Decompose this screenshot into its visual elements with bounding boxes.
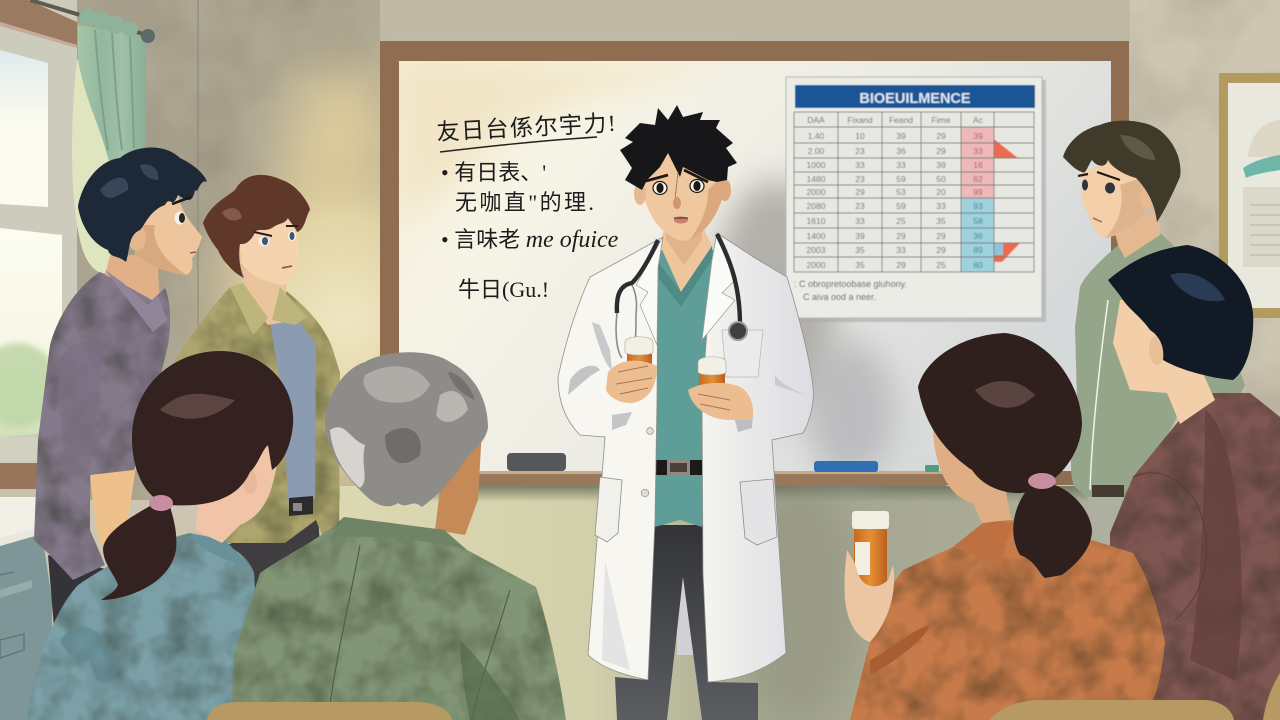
chart table: 29 [896,231,906,241]
neck and face [664,215,702,265]
chart table: 20 [936,187,946,197]
whiteboard handwriting: 牛日(Gu.! [458,277,549,302]
chart table: 25 [896,216,906,226]
chart table: 23 [855,174,865,184]
coat left panel [558,237,663,680]
chart table: 29 [936,245,946,255]
chart footnote [794,279,907,302]
chair backs [207,673,1280,720]
whiteboard handwriting: 友日台係尔宇力! [436,111,618,145]
hair [1063,121,1180,222]
person: grey-haired man in green jacket [232,352,566,720]
hair [203,175,310,278]
chart table: 35 [855,245,865,255]
eye and brow [172,197,191,204]
hair [78,147,207,262]
wall poster at right [1219,73,1280,318]
chart table: 2.00 [808,146,825,156]
chart header [795,85,1035,108]
chart table: 29 [896,260,906,270]
neck [1113,210,1160,258]
chart table: 53 [896,187,906,197]
whiteboard handwriting: • 有日表、' [441,160,546,185]
neck [933,430,1012,530]
eyes and mouth [254,226,298,236]
shirt [34,272,170,580]
chart table: 33 [896,160,906,170]
lapels [636,233,735,345]
T-shirt [270,320,316,500]
neck [195,445,279,543]
coat right panel [702,233,813,682]
chart header: BIOEUILMENCE [859,91,971,107]
whiteboard handwriting: 无咖直"的理. [455,190,596,215]
hair [1108,245,1253,380]
chart table: 39 [855,231,865,241]
chart table: 62 [973,174,983,184]
person: standing man in green shirt [1063,121,1245,600]
hair tie [1028,473,1056,489]
bioequivalence chart poster [786,77,1046,322]
person: pharmacist in white coat [558,105,813,720]
chart table: 59 [896,174,906,184]
chart table: 33 [896,245,906,255]
bottle in hand [845,511,894,642]
hair [918,333,1082,493]
neck [105,255,160,302]
chart table: DAA [807,115,825,125]
face and neck [1113,300,1215,424]
ponytail [1013,484,1092,578]
chart table: 23 [855,201,865,211]
chart table: 39 [896,131,906,141]
chart table: 93 [973,201,983,211]
chart table: 16 [973,160,983,170]
chart table: 1000 [807,160,826,170]
hair [620,105,737,190]
chart table: 39 [936,160,946,170]
chart table: Fime [932,115,951,125]
person: woman in orange shirt with bottle [845,333,1165,720]
chart table: 29 [936,131,946,141]
chart table: 35 [936,216,946,226]
chart table: 2003 [807,245,826,255]
chart table: Fixand [847,115,873,125]
curtain [30,0,155,273]
trousers [48,555,110,650]
hair [132,351,293,505]
chart table: 89 [973,245,983,255]
chart table: 33 [936,201,946,211]
chart table: 59 [896,201,906,211]
chart table: 35 [855,260,865,270]
face [135,195,202,275]
chart table [794,112,1034,272]
forearm [90,466,136,545]
cabinet and papers [0,489,60,720]
chart table: 1400 [807,231,826,241]
chart table: 99 [973,187,983,197]
trousers [615,525,758,720]
facial features [646,170,708,200]
whiteboard handwriting [436,111,619,302]
chart table: 2000 [807,260,826,270]
chart table: 10 [855,131,865,141]
chart table: 29 [936,231,946,241]
tray with erasers [476,453,946,486]
chart footnote: : C obropretoobase gluhony. [794,279,907,289]
chart table: 80 [973,260,983,270]
person: youth in olive jacket [175,175,340,595]
chart table: 36 [973,231,983,241]
stethoscope [616,234,747,358]
chart table: 29 [855,187,865,197]
person: man in purple shirt [34,147,207,650]
chart table: 1610 [807,216,826,226]
ponytail [101,506,176,600]
chart table: 58 [973,216,983,226]
chart table: 39 [973,131,983,141]
chart table: 23 [855,146,865,156]
chart table: Feand [889,115,913,125]
chart table: 2000 [807,187,826,197]
face [1081,150,1150,238]
chart table: 29 [936,146,946,156]
right bottle and hand [688,357,753,420]
belt [655,460,702,475]
chart table: 25 [936,260,946,270]
person: man in maroon shirt, seen from behind [1108,245,1280,720]
face [235,208,298,285]
left bottle and hand [606,337,657,403]
chart table: 50 [936,174,946,184]
teal scrubs [655,250,714,527]
person: woman in blue shirt, seen from behind [27,351,293,720]
chart table: 33 [855,160,865,170]
button [647,428,653,434]
whiteboard handwriting: • 言味老 me ofuice [441,227,619,253]
eyes [1078,172,1120,180]
grey hair [325,352,488,507]
coat back and gap [677,575,693,655]
chart table: 33 [855,216,865,226]
hair tie [149,495,173,511]
chart table: 1480 [807,174,826,184]
chart table: Ac [973,115,984,125]
window [0,0,77,490]
whiteboard [380,41,1129,486]
chart table: 33 [973,146,983,156]
chart table: 1.40 [808,131,825,141]
chart footnote: C aiva ood a neer. [803,292,876,302]
chart table: 2080 [807,201,826,211]
chart table: 36 [896,146,906,156]
